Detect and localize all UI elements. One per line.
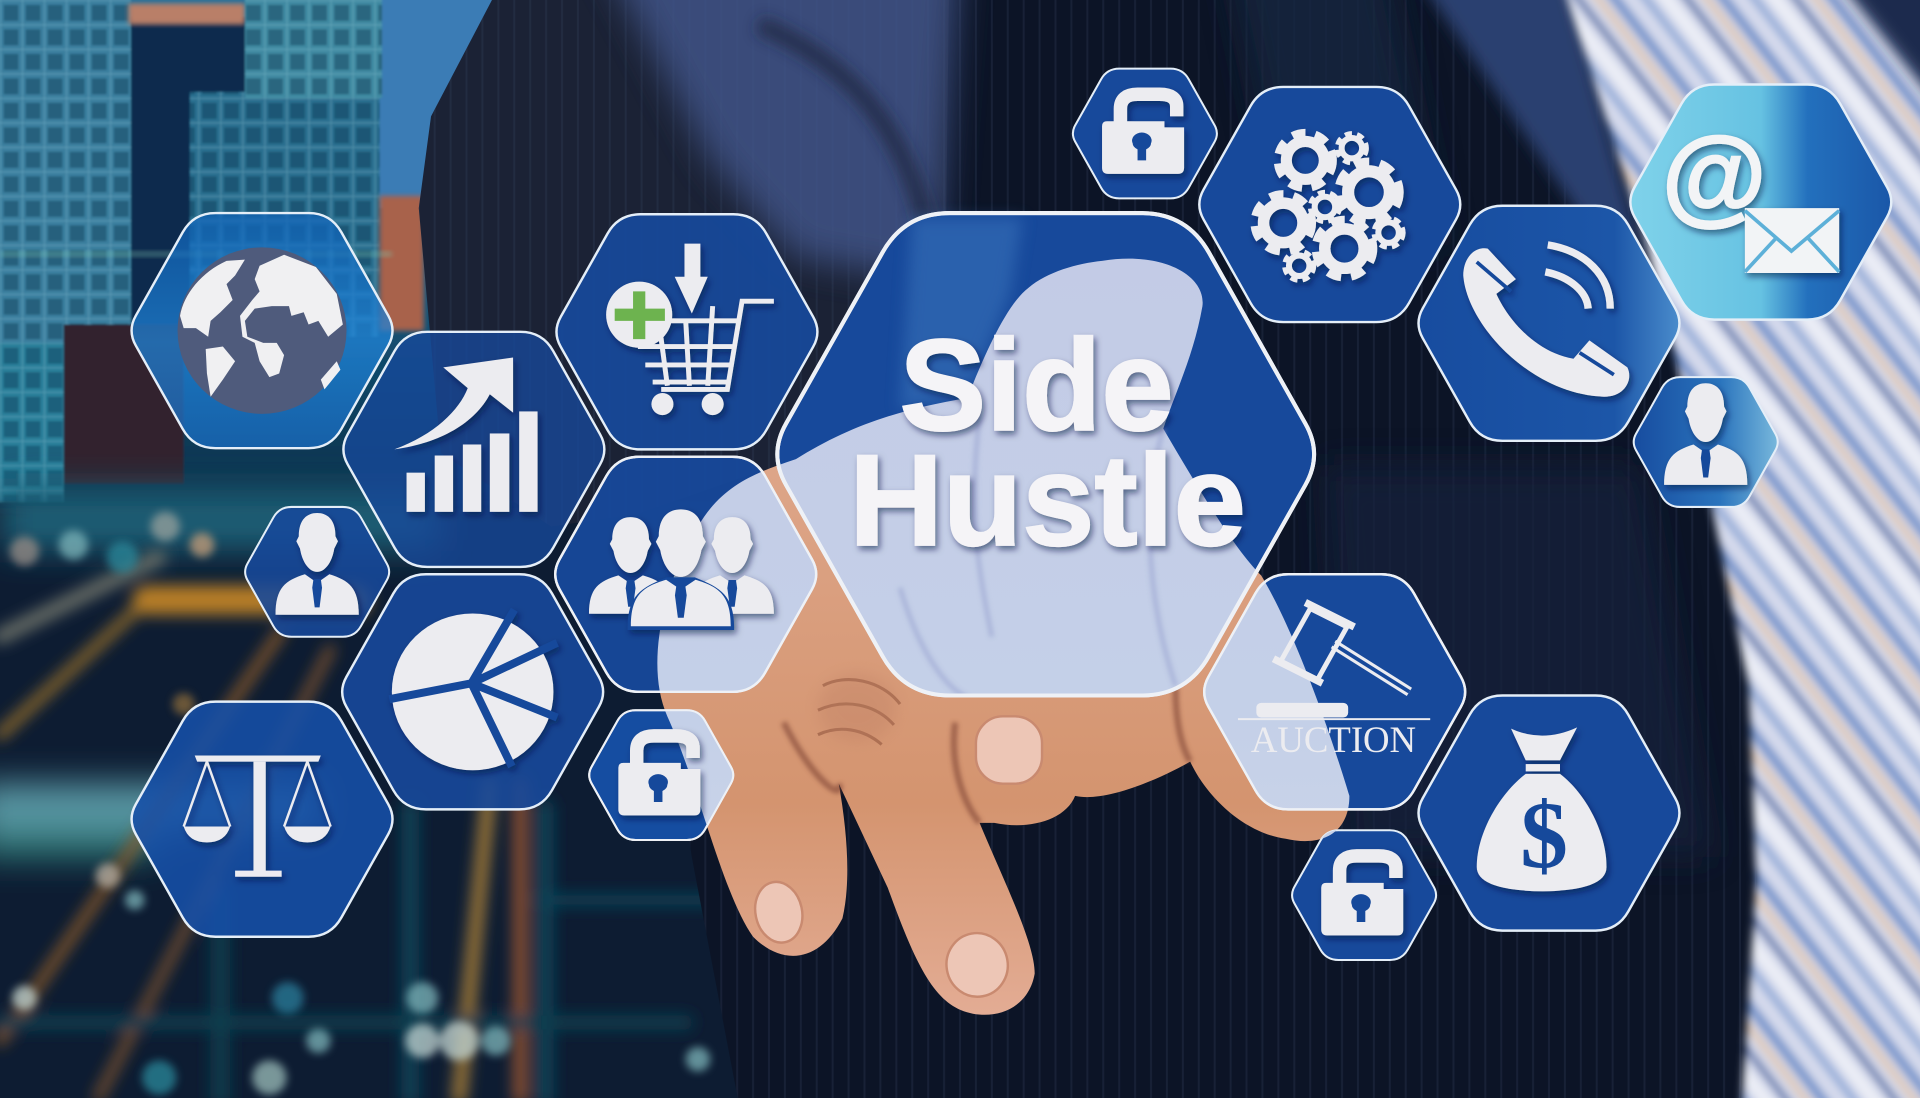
blurred street and lights — [0, 490, 759, 1098]
auction label: AUCTION — [1251, 719, 1416, 760]
hand seen through the hexagons — [657, 258, 1350, 838]
title: Side Hustle: Side — [899, 313, 1174, 458]
title: Side Hustle — [849, 313, 1246, 573]
striped shirt — [1555, 0, 1920, 1098]
icon: growth chart — [394, 358, 538, 512]
hexagon: globe — [132, 213, 393, 448]
hexagon: team — [555, 457, 816, 692]
icon: auction gavel — [1238, 602, 1430, 760]
icon: lock bottom — [1321, 856, 1403, 936]
hand pointing — [657, 259, 1349, 1015]
sleeve — [419, 0, 961, 527]
icon: team of people — [589, 509, 774, 627]
suit body — [673, 0, 1756, 1098]
hexagon: scales — [132, 702, 393, 937]
hexagon: shopping cart — [556, 214, 817, 449]
title: Side Hustle: Hustle — [849, 428, 1246, 573]
icon: gears — [1255, 133, 1403, 281]
hexagon: email — [1630, 84, 1891, 320]
city skyline — [0, 0, 514, 514]
icon: at sign and envelope: @ — [1662, 114, 1767, 235]
hexagon: auction — [1204, 574, 1465, 809]
hexagon: top lock — [1073, 69, 1217, 198]
icon: money bag — [1477, 727, 1607, 891]
icon: person left — [276, 513, 359, 615]
hexagon: money — [1419, 696, 1679, 931]
hexagon outlines redrawn over the hand — [555, 213, 1465, 840]
light patch inside central hexagon — [900, 218, 1022, 410]
hexagon: phone — [1419, 206, 1679, 441]
icon: lock top — [1102, 94, 1184, 174]
icon: pie chart — [389, 610, 557, 770]
hexagon: small person left — [245, 507, 389, 637]
hexagon: pie chart — [342, 574, 603, 809]
icon: globe — [178, 247, 347, 414]
hexagon: growth chart — [343, 332, 604, 567]
hexagon: central main — [777, 213, 1314, 696]
icon: at sign and envelope — [1662, 114, 1839, 273]
icon: lock left — [618, 736, 700, 816]
hexagon: small lock left — [589, 710, 733, 840]
icon: person right — [1664, 383, 1747, 485]
hexagon: gears — [1199, 87, 1460, 322]
hexagon: bottom lock — [1292, 830, 1436, 960]
hexagon: small person right — [1634, 377, 1778, 507]
icon: shopping cart — [606, 244, 774, 415]
icon: scales of justice — [184, 756, 331, 877]
icon: telephone — [1463, 245, 1629, 397]
dollar sign: $ — [1520, 782, 1568, 888]
